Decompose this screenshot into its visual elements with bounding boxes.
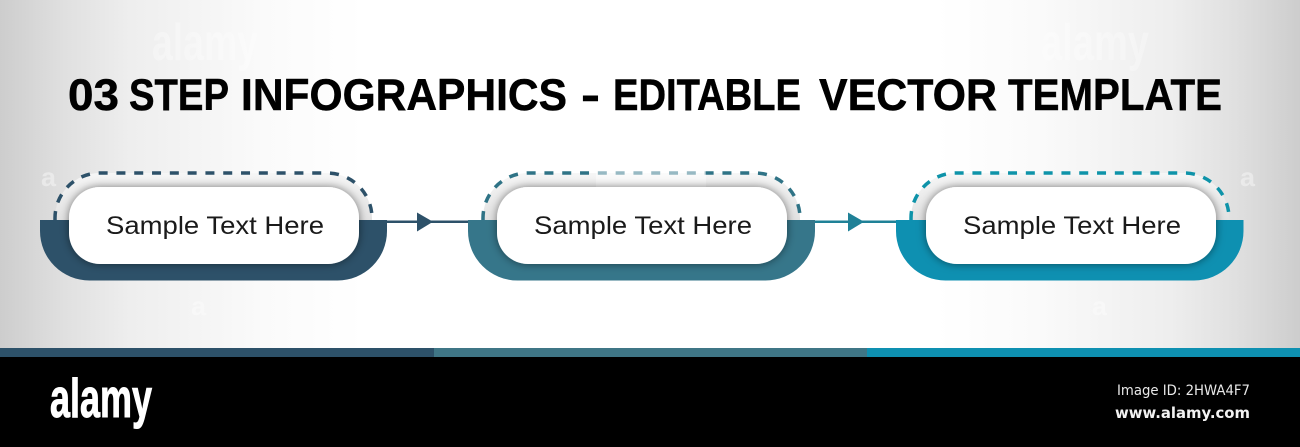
title [68,71,1222,120]
step 1 [40,173,387,280]
step 1 base [40,220,387,280]
tricolour bar [0,348,1300,357]
connector arrow 1 [386,212,470,232]
step 2 base [468,220,815,280]
alamy logo: alamy [50,367,152,429]
title: STEP [129,71,229,120]
step 3 dashed outline [911,173,1229,220]
step 3 base [896,220,1244,280]
background [0,0,1300,348]
step 2 card [497,187,787,264]
watermark top left: alamy [152,14,258,72]
watermark letter left: a [41,162,57,192]
watermark letter right: a [1240,162,1256,192]
watermark centre [596,170,706,187]
image id: Image ID: 2HWA4F7 [1117,383,1250,399]
step 1 card [69,187,359,264]
watermark letter bottom right: a [1092,291,1108,321]
title: 03 [68,71,119,120]
title: EDITABLE [613,71,801,120]
title: - [581,71,600,120]
footer band [0,357,1300,447]
website: www.alamy.com [1115,404,1250,422]
step 3 card: Sample Text Here [963,212,1181,240]
step 3 card [926,187,1216,264]
step 2 card: Sample Text Here [534,212,752,240]
step 2 [468,170,815,280]
step 3 [896,173,1244,280]
title: TEMPLATE [1008,71,1222,120]
connector arrow 2 [814,212,898,232]
watermark top right: alamy [1041,14,1149,72]
title: VECTOR [819,71,997,120]
step 1 card: Sample Text Here [106,212,324,240]
title: INFOGRAPHICS [241,71,567,120]
step 1 dashed outline [55,173,372,220]
step 2 dashed outline [483,173,800,220]
watermark letter bottom left: a [191,291,207,321]
